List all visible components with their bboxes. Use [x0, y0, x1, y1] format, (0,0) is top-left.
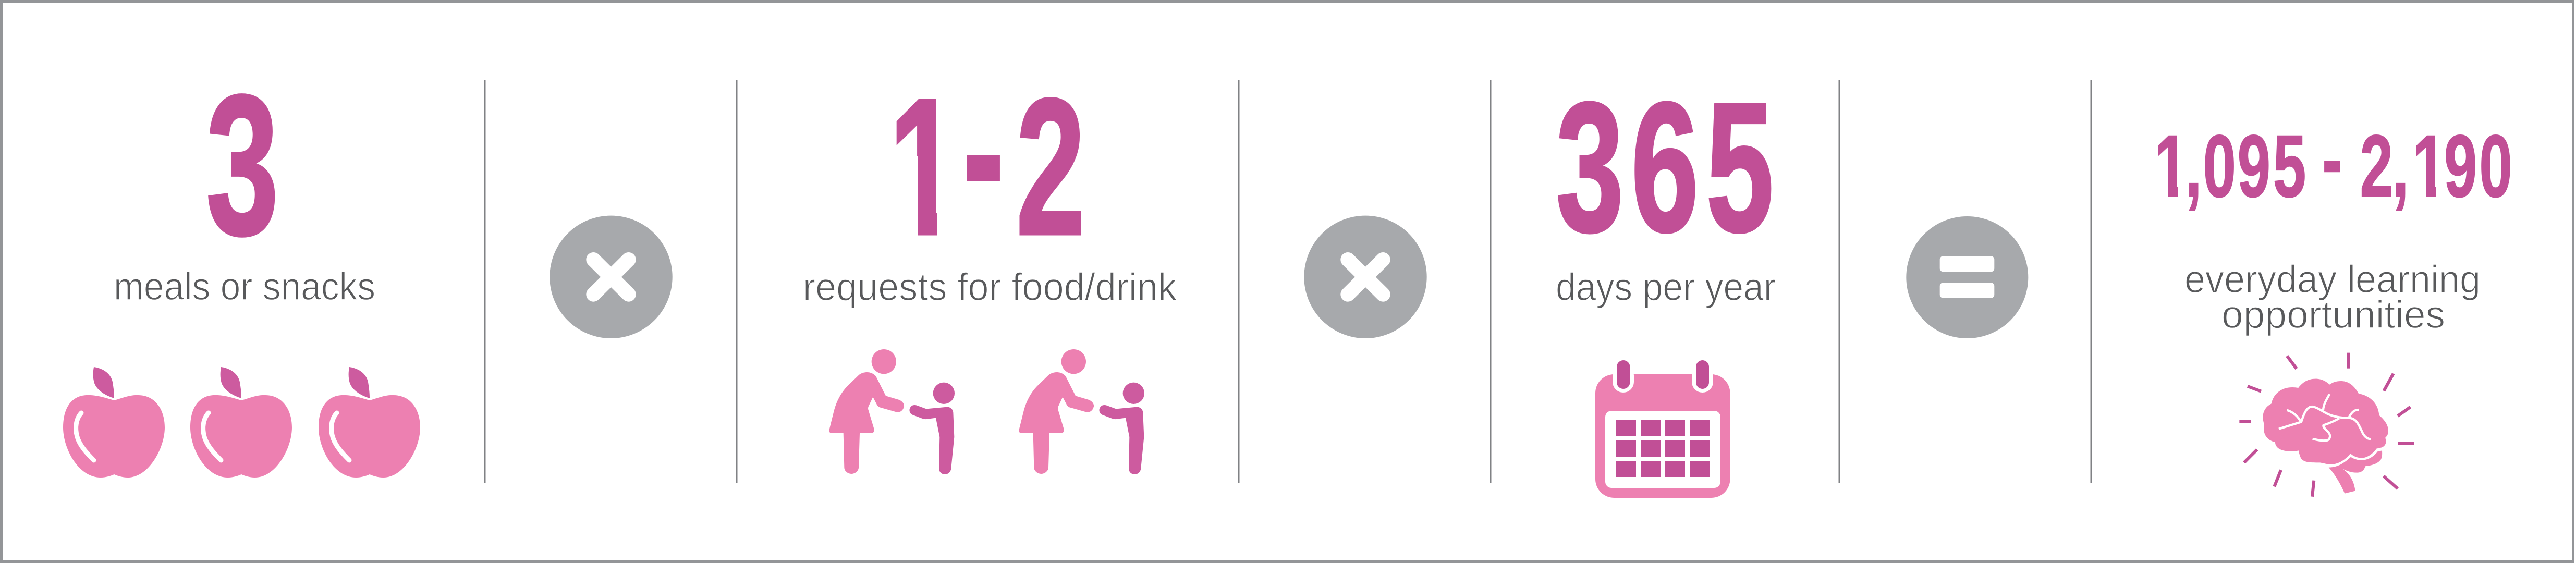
icon: adult and child pair 1 — [829, 349, 955, 474]
icon: multiply operator 1 — [550, 216, 673, 338]
icon: adult and child pair 2 — [1019, 349, 1144, 474]
icon: apple 1 — [63, 367, 165, 478]
big number: 1-2: 1-2 — [889, 43, 1085, 276]
icon: equals operator — [1906, 216, 2028, 338]
label: requests for food/drink: requests for food/drink — [803, 265, 1177, 309]
big number: 1,095 - 2,190: 1,095 - 2,190 — [2154, 109, 2512, 215]
label: everyday learning opportunities: everyday learning — [2184, 258, 2481, 301]
label: everyday learning opportunities: opportunities — [2221, 293, 2445, 336]
panel: everyday learning opportunities — [2154, 109, 2512, 497]
panel: days per year — [1556, 64, 1776, 498]
panel: requests for food/drink — [806, 97, 1176, 474]
label: meals or snacks: meals or snacks — [114, 265, 375, 308]
label: everyday learning opportunities — [2184, 258, 2481, 336]
icon: multiply operator 2 — [1304, 216, 1427, 338]
label: days per year: days per year — [1556, 265, 1776, 309]
panel: meals or snacks — [63, 53, 420, 478]
icon: apple 3 — [319, 367, 420, 478]
big number: 3: 3 — [206, 53, 279, 277]
icon: three apples — [63, 367, 420, 478]
icon: apple 2 — [190, 367, 292, 478]
big number: 365: 365 — [1556, 64, 1774, 271]
icon: calendar — [1595, 360, 1730, 498]
icon: brain with rays — [2239, 353, 2414, 497]
